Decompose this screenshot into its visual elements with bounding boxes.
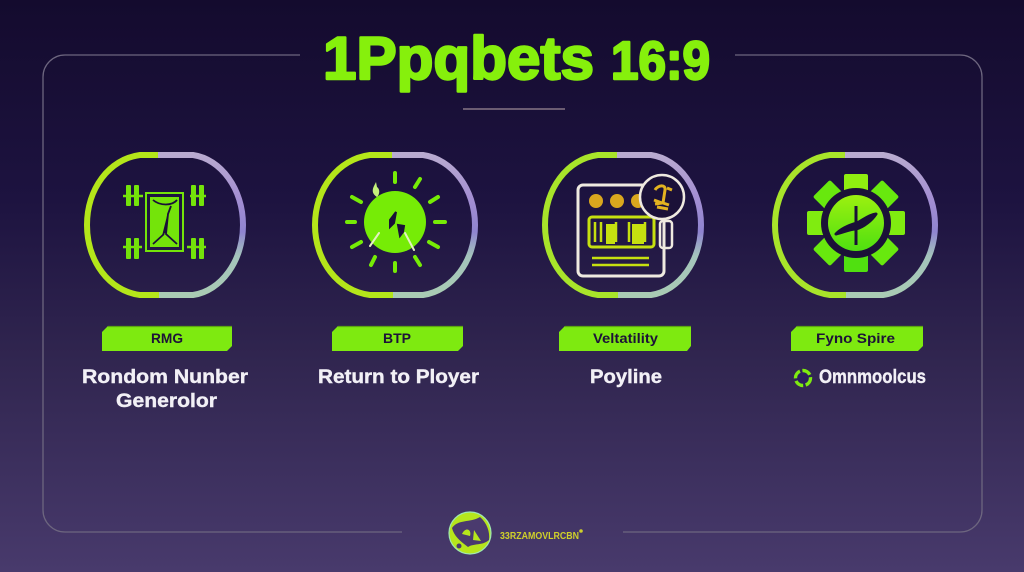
icon: sun <box>347 173 445 271</box>
ring: RNG <box>87 155 243 295</box>
panel: Free Spins <box>775 155 935 388</box>
tag: RNG: RMG <box>151 330 183 346</box>
title: 16:9 <box>611 31 710 91</box>
tag: RTP: BTP <box>383 330 411 346</box>
footer text: 33RZAMOVLRCBN <box>500 530 579 542</box>
label icon: refresh <box>796 370 810 386</box>
label: Random Number Generator <box>82 366 248 412</box>
footer mark <box>579 529 583 533</box>
icon: circuit chip <box>123 185 206 259</box>
title <box>323 25 710 92</box>
outer frame <box>43 55 982 532</box>
label: Omnmoolcus: Omnmoolcus <box>819 366 926 388</box>
panel: RTP <box>315 155 479 388</box>
panel: RNG <box>82 155 248 412</box>
icon: slot machine <box>578 175 684 276</box>
tag: Volatility: Veltatility <box>593 330 658 346</box>
label: Payline: Poyline <box>590 366 662 388</box>
ring: Volatility <box>545 155 701 295</box>
label: Random Number Generator: Generolor <box>116 390 217 412</box>
tag: RNG <box>102 326 232 351</box>
title: 1Ppqbets <box>323 25 594 92</box>
tag: RTP <box>332 326 463 351</box>
tag: Volatility <box>559 326 691 351</box>
panel: Volatility <box>545 155 701 388</box>
ring: RTP <box>315 155 475 295</box>
ring: Free Spins <box>775 155 935 295</box>
footer logo <box>449 512 491 554</box>
label: Random Number Generator: Rondom Nunber <box>82 366 248 388</box>
label: Return to Player: Return to Ployer <box>318 366 479 388</box>
tag: Free Spins: Fyno Spire <box>816 330 895 346</box>
icon: gear <box>809 176 903 270</box>
tag: Free Spins <box>791 326 923 351</box>
title divider <box>463 108 565 110</box>
